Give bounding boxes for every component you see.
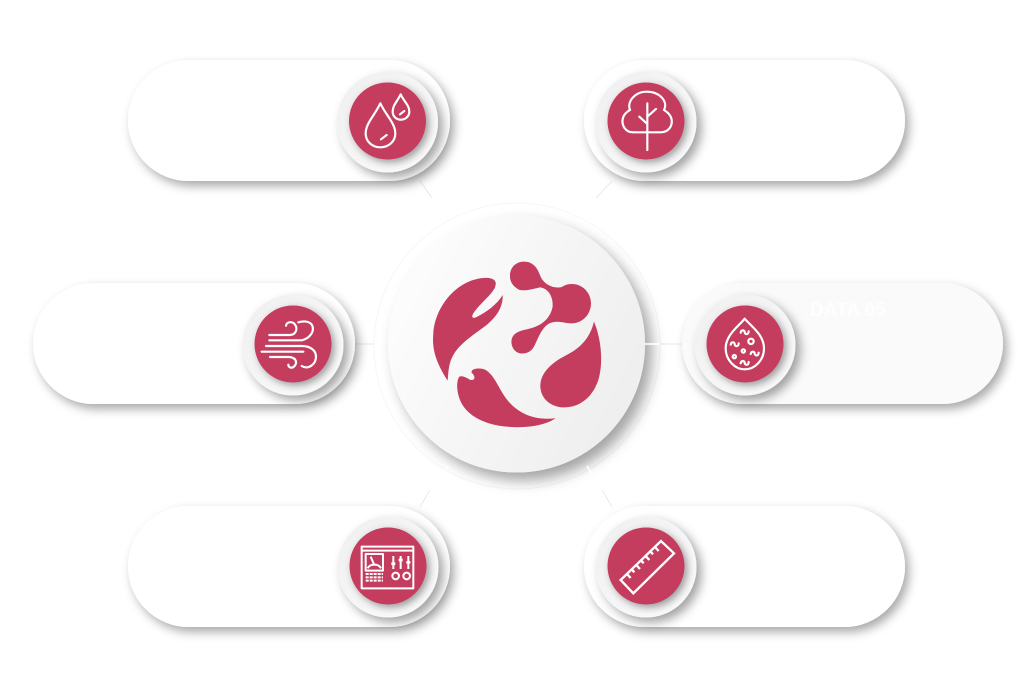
icon: tree [608, 82, 684, 160]
white spokes across the shadow [436, 344, 660, 487]
icon disc: top right [596, 72, 696, 172]
panel: middle right [682, 283, 1003, 404]
icon: microbes in drop [706, 306, 784, 382]
central hub [374, 203, 660, 489]
main circle [388, 216, 645, 472]
icon disc: bottom left [338, 516, 438, 618]
icon: ruler [608, 528, 684, 604]
panel: middle left [33, 283, 355, 404]
panel: bottom left [128, 506, 450, 627]
outer ring [374, 203, 660, 489]
faint body text: Lorem ipsum dolor sit amet, [810, 329, 964, 343]
faint heading: DATA 05 [810, 300, 886, 321]
icon: wind [254, 306, 332, 382]
panel: bottom right [584, 506, 905, 627]
icon disc: middle right [694, 294, 796, 396]
faint body text: Pellentesque risus nisl, [810, 356, 938, 370]
panel: top right [584, 60, 905, 181]
faint body text: consectetur adipiscing elit. [810, 342, 957, 356]
icon disc: bottom right [596, 516, 696, 618]
panel: top left [128, 60, 450, 181]
icon disc: middle left [242, 294, 344, 396]
faint body text: elementum in tellus sed. [810, 370, 945, 384]
icon: control panel [350, 528, 426, 604]
logo [433, 262, 601, 427]
icon disc: top left [337, 72, 438, 172]
icon: water drops [349, 82, 426, 160]
connector lines [355, 181, 682, 507]
